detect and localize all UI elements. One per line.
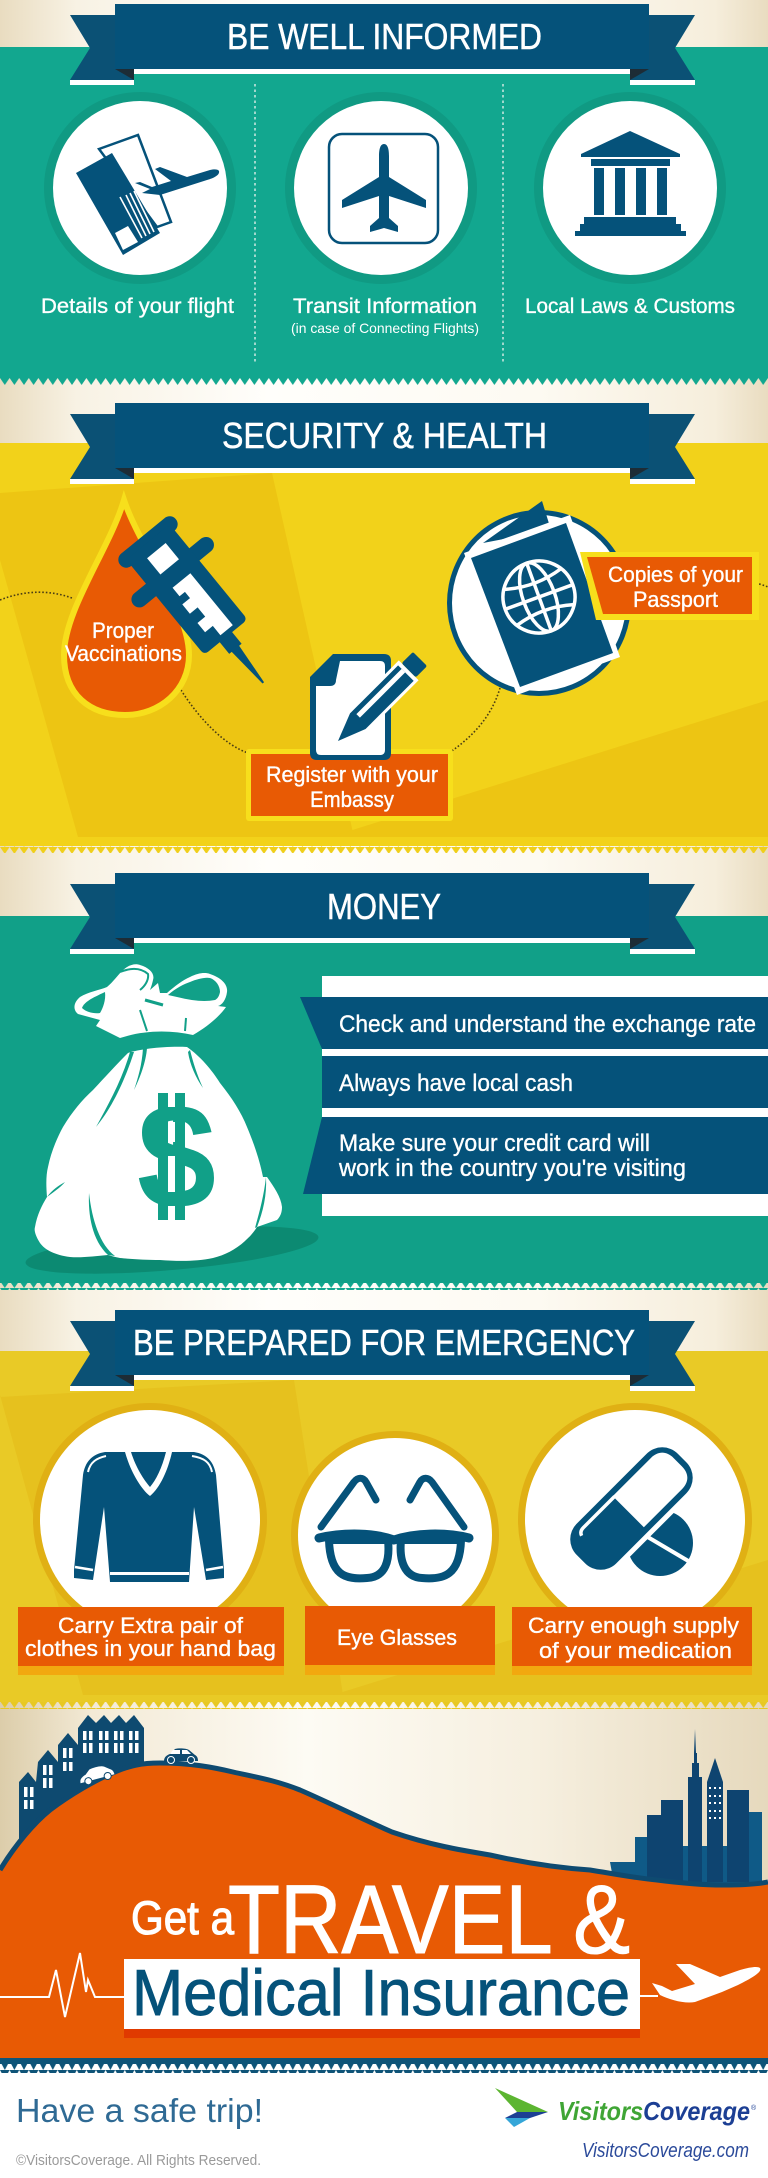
banner: money: MONEY [327, 886, 441, 927]
icon: orange drop with vaccinations label [64, 500, 189, 715]
icon: orange drop with vaccinations label: Vaccinations [65, 641, 182, 666]
icon: document and pencil [310, 649, 430, 760]
text: transit information [291, 295, 479, 336]
callout: copies of your passport: Passport [633, 587, 718, 612]
callout: register with your embassy [246, 749, 453, 821]
callout: copies of your passport: Copies of your [608, 562, 743, 587]
icon: passport [447, 501, 631, 696]
heading: get a travel and: TRAVEL & [228, 1865, 630, 1974]
illustration: blue car on hill [164, 1748, 198, 1764]
banner: be prepared for emergency [70, 1310, 695, 1391]
logo: visitors coverage [495, 2088, 757, 2127]
callout: enough medication [512, 1607, 752, 1675]
panel: money tips list: work in the country you're visiting [338, 1155, 686, 1182]
text: transit information: (in case of Connecting Flights) [291, 320, 479, 336]
callout: eye glasses [305, 1606, 495, 1675]
icon: money bag [24, 964, 320, 1283]
icon: flight tickets [44, 92, 236, 284]
icon: sweater [33, 1403, 267, 1637]
text: transit information: Transit Information [293, 295, 477, 318]
footer: copyright: ©VisitorsCoverage. All Rights Reserved. [16, 2152, 261, 2169]
illustration: orange hill [0, 1763, 768, 2058]
illustration: left town skyline [19, 1715, 144, 1850]
heading: get a travel and: Get a [131, 1891, 235, 1944]
logo: visitors coverage: ® [751, 2104, 757, 2112]
callout: enough medication: of your medication [539, 1638, 732, 1663]
panel: be prepared for emergency [0, 1310, 768, 1709]
callout: carry extra clothes [18, 1607, 284, 1675]
panel: money [0, 873, 768, 1290]
callout: eye glasses: Eye Glasses [337, 1625, 457, 1650]
icon: airport plane sign [285, 92, 477, 284]
callout: carry extra clothes: Carry Extra pair of [58, 1613, 244, 1638]
icon: white plane [640, 1964, 760, 2003]
banner: security and health: SECURITY & HEALTH [222, 415, 547, 456]
panel: money tips list: Make sure your credit card will [339, 1130, 650, 1157]
callout: register with your embassy: Register with your [266, 762, 438, 787]
banner: money [70, 873, 695, 954]
panel: money tips list [300, 976, 768, 1216]
callout: carry extra clothes: clothes in your hand bag [25, 1636, 276, 1661]
icon: pills [518, 1403, 752, 1637]
illustration: white car on hill [78, 1763, 115, 1787]
text: details of your flight: Details of your flight [41, 295, 234, 318]
text: local laws and customs: Local Laws & Customs [525, 295, 735, 318]
illustration: right city skyline [610, 1729, 762, 1884]
banner: security and health [70, 403, 695, 484]
icon: courthouse [534, 92, 726, 284]
callout: copies of your passport [580, 552, 759, 620]
banner: be well informed [70, 4, 695, 85]
panel: money tips list: Check and understand the exchange rate [339, 1011, 756, 1038]
logo: visitors coverage: VisitorsCoverage [558, 2096, 750, 2126]
icon: orange drop with vaccinations label: Proper [92, 618, 154, 643]
panel: insurance call to action [0, 1715, 768, 2073]
banner: be well informed: BE WELL INFORMED [227, 16, 542, 57]
icon: syringe [103, 504, 303, 715]
banner: be prepared for emergency: BE PREPARED FOR EMERGENCY [133, 1322, 635, 1363]
footer: have a safe trip: Have a safe trip! [16, 2092, 263, 2129]
icon: eye glasses [291, 1431, 499, 1639]
panel: money tips list: Always have local cash [339, 1070, 573, 1097]
icon: money bag: $ [137, 1072, 216, 1240]
panel: be well informed [0, 4, 768, 385]
callout: enough medication: Carry enough supply [528, 1613, 739, 1638]
heading: medical insurance: Medical Insurance [132, 1956, 630, 2029]
panel: security and health [0, 403, 768, 853]
callout: register with your embassy: Embassy [310, 787, 394, 812]
line: heartbeat [0, 1953, 124, 2017]
